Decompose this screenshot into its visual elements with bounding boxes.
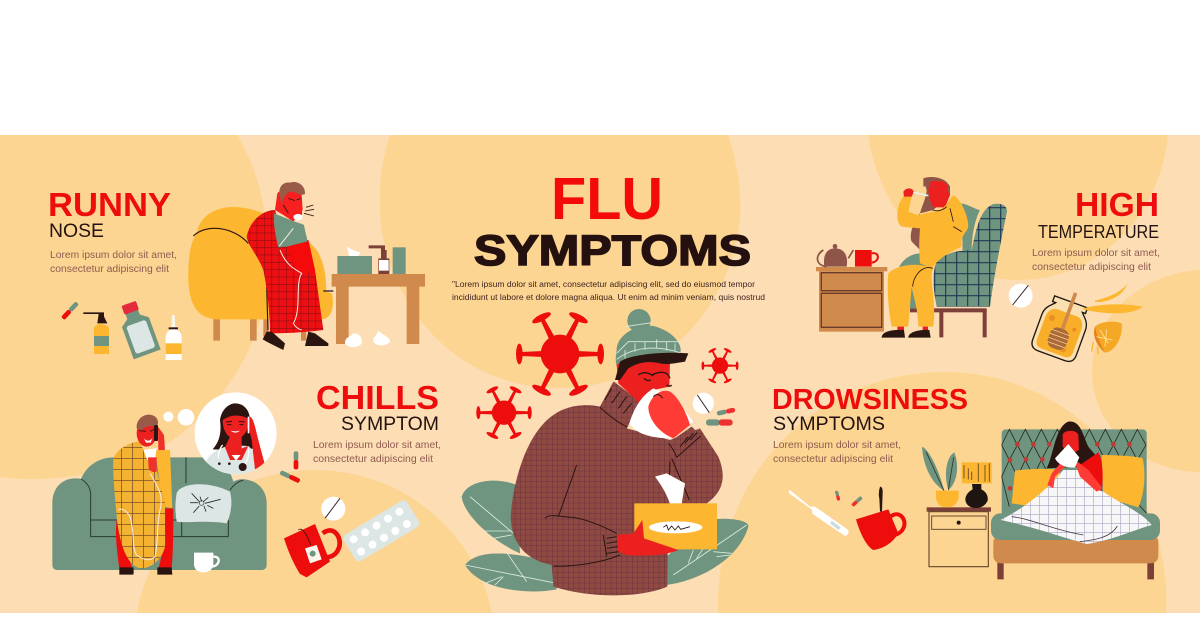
- thermometer: [789, 490, 849, 536]
- hat: [616, 309, 681, 366]
- man with blanket and phone: [113, 415, 173, 575]
- medicine items: [61, 298, 182, 360]
- red mug with tea bag: [284, 524, 340, 577]
- virus particles: [476, 310, 738, 440]
- panel: high temperature text: HIGH: [1075, 186, 1159, 223]
- panel: high temperature text: Lorem ipsum dolor sit amet,: [1032, 247, 1160, 259]
- panel: drowsiness text: consectetur adipiscing elit: [773, 453, 893, 465]
- panel: chills illustration: [52, 392, 421, 577]
- panel: chills text: SYMPTOM: [341, 414, 439, 435]
- panel: chills text: CHILLS: [316, 379, 439, 416]
- red mug with spoon: [856, 487, 905, 550]
- leaves and lemon: [1083, 284, 1143, 354]
- blister pack: [342, 499, 421, 563]
- panel: runny nose text: [48, 186, 177, 275]
- woman with thermometer: [882, 177, 968, 338]
- panel: runny nose text: Lorem ipsum dolor sit amet,: [50, 249, 177, 261]
- panel: drowsiness text: DROWSINESS: [772, 384, 968, 416]
- bed: [991, 429, 1160, 579]
- intro text: incididunt ut labore et dolore magna aliqua. Ut enim ad minim veniam, quis nostrud: [452, 292, 765, 302]
- panel: high temperature text: [1032, 186, 1160, 273]
- intro text: "Lorem ipsum dolor sit amet, consectetur adipiscing elit, sed do eiusmod tempor: [452, 279, 755, 289]
- panel: runny nose illustration: [61, 182, 425, 360]
- intro text: [452, 279, 765, 302]
- panel: chills text: consectetur adipiscing elit: [313, 453, 433, 465]
- capsules: [279, 451, 301, 483]
- armchair: [188, 207, 333, 341]
- pill and capsules: [693, 393, 736, 426]
- leaves: [462, 481, 748, 591]
- panel: drowsiness illustration: [789, 422, 1160, 579]
- side table with tissue box and bottles: [332, 245, 425, 347]
- bedside cabinet with teapot and cup: [816, 244, 887, 332]
- armchair: [899, 203, 1007, 337]
- coffee cup: [194, 553, 219, 572]
- thought bubble with doctor: [163, 392, 277, 477]
- nightstand: [927, 507, 991, 567]
- honey jar: [1030, 285, 1096, 364]
- panel: high temperature text: TEMPERATURE: [1038, 222, 1159, 242]
- panel: runny nose text: consectetur adipiscing elit: [50, 263, 169, 275]
- panel: drowsiness text: SYMPTOMS: [773, 414, 885, 435]
- panel: central sneezing man: [462, 309, 748, 595]
- panel: runny nose text: RUNNY: [48, 186, 171, 223]
- capsules: [835, 490, 863, 507]
- sick man in blanket: [247, 182, 328, 350]
- tissue box and hand: [617, 473, 717, 556]
- title: FLU SYMPTOMS: [474, 166, 751, 275]
- panel: chills text: Lorem ipsum dolor sit amet,: [313, 439, 441, 451]
- panel: high temperature text: consectetur adipiscing elit: [1032, 261, 1151, 273]
- panel: drowsiness text: Lorem ipsum dolor sit amet,: [773, 439, 901, 451]
- sweater body: [511, 382, 723, 595]
- panel: drowsiness text: [772, 384, 968, 465]
- background band: [0, 135, 1200, 613]
- title: FLU SYMPTOMS: SYMPTOMS: [474, 227, 751, 275]
- panel: high temperature illustration: [816, 177, 1143, 364]
- panel: runny nose text: NOSE: [49, 221, 104, 242]
- panel: chills text: [313, 379, 441, 465]
- title: FLU SYMPTOMS: FLU: [551, 166, 663, 232]
- woman in bed with tissue: [1001, 422, 1152, 544]
- lamp: [962, 462, 992, 508]
- pill: [1009, 284, 1033, 308]
- sofa: [52, 457, 267, 570]
- head and hand with tissue: [615, 353, 693, 438]
- pill: [321, 497, 345, 521]
- plant: [922, 447, 959, 507]
